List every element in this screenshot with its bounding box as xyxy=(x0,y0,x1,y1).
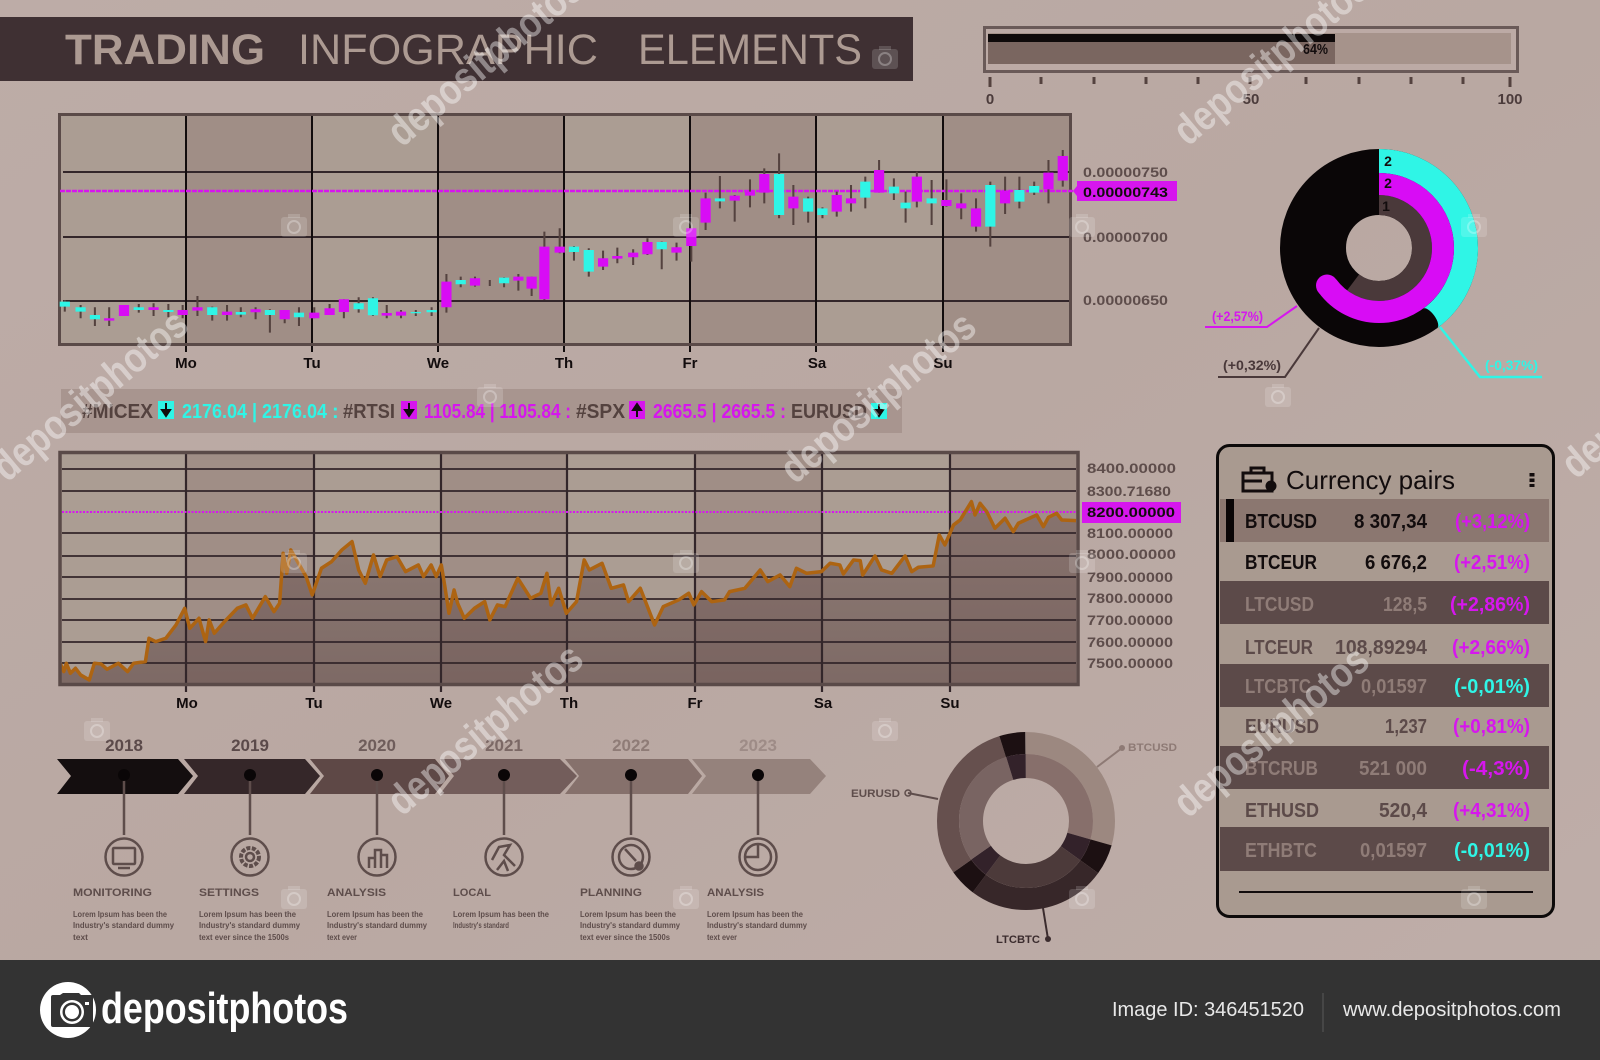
candlestick weekday labels: Mo xyxy=(175,355,197,372)
watermark: depositphotos xyxy=(771,302,985,492)
step: analysis 2023: text ever xyxy=(707,933,737,942)
step: analysis: Lorem Ipsum has been the xyxy=(327,910,424,919)
row: LTCEUR: LTCEUR xyxy=(1245,637,1313,659)
title banner: ELEMENTS xyxy=(638,26,862,74)
row: LTCEUR xyxy=(1245,637,1530,659)
icon: monitor xyxy=(106,838,142,876)
step: planning: PLANNING xyxy=(580,887,642,899)
step: planning xyxy=(580,887,681,942)
line chart weekday labels: Th xyxy=(560,695,578,712)
ticker strip: #SPX xyxy=(576,401,626,423)
row: LTCUSD: (+2,86%) xyxy=(1450,594,1530,616)
donut label: LTCBTC xyxy=(996,908,1051,946)
line chart price axis: 8000.00000 xyxy=(1087,546,1176,562)
watermark: depositphotos xyxy=(1164,636,1378,826)
timeline years: 2020 xyxy=(358,736,396,755)
step: planning: Industry's standard dummy xyxy=(580,921,681,930)
site url: www.depositphotos.com xyxy=(1342,999,1561,1021)
line chart price axis: 7800.00000 xyxy=(1087,590,1173,606)
candlestick weekday labels: Th xyxy=(555,355,573,372)
row: BTCUSD: 8 307,34 xyxy=(1354,511,1428,533)
progress gauge: 50 xyxy=(1243,91,1259,108)
line chart weekday labels: Fr xyxy=(688,695,703,712)
timeline years: 2019 xyxy=(231,736,269,755)
candlestick weekday labels: Su xyxy=(933,355,953,372)
ticker strip xyxy=(61,389,902,433)
row: ETHBTC: 0,01597 xyxy=(1360,840,1427,862)
row: LTCBTC xyxy=(1220,664,1549,707)
row: ETHBTC: ETHBTC xyxy=(1245,840,1317,862)
step: monitoring: MONITORING xyxy=(73,887,152,899)
line chart weekday labels: Sa xyxy=(814,695,833,712)
line chart weekday labels: Mo xyxy=(176,695,198,712)
row: EURUSD: (+0,81%) xyxy=(1453,716,1530,738)
line chart weekday labels xyxy=(176,695,960,712)
callout: +0,32%: (+0,32%) xyxy=(1223,357,1281,373)
row: LTCEUR: 108,89294 xyxy=(1335,637,1428,659)
step: settings xyxy=(199,887,301,942)
step: settings: SETTINGS xyxy=(199,887,259,899)
panel heading: Currency pairs xyxy=(1286,465,1455,495)
title banner: INFOGRAPHIC xyxy=(298,26,598,74)
row: BTCUSD: (+3,12%) xyxy=(1455,511,1530,533)
candlestick price axis: 0.00000750 xyxy=(1083,164,1168,180)
progress gauge: 100 xyxy=(1497,91,1523,108)
timeline years: 2023 xyxy=(739,736,777,755)
step: local: LOCAL xyxy=(453,887,491,899)
donut label: LTCBTC: LTCBTC xyxy=(996,934,1040,946)
row: ETHUSD: 520,4 xyxy=(1379,800,1428,822)
line chart price axis: 8200.00000 xyxy=(1087,504,1175,520)
step: monitoring xyxy=(73,887,175,942)
line chart price axis: 8300.71680 xyxy=(1087,483,1171,499)
step: local: Lorem Ipsum has been the xyxy=(453,910,550,919)
callout: +2,57% xyxy=(1205,306,1297,327)
timeline years: 2022 xyxy=(612,736,650,755)
title banner: TRADING xyxy=(65,26,265,74)
icon: pie xyxy=(740,838,776,876)
row: ETHUSD xyxy=(1245,800,1530,822)
row: BTCEUR: (+2,51%) xyxy=(1454,552,1530,574)
callout: +0,32% xyxy=(1218,328,1319,377)
line chart price axis: 7900.00000 xyxy=(1087,569,1173,585)
ticker strip: 2665.5 | 2665.5 : xyxy=(653,401,786,423)
step: settings: Lorem Ipsum has been the xyxy=(199,910,297,919)
callout: -0,37%: (-0,37%) xyxy=(1485,357,1538,373)
row: BTCEUR: BTCEUR xyxy=(1245,552,1317,574)
callout: -0,37% xyxy=(1440,327,1542,377)
step: analysis: ANALYSIS xyxy=(327,887,386,899)
row: BTCRUB: (-4,3%) xyxy=(1462,758,1530,780)
line chart price axis xyxy=(1082,460,1181,671)
icon: gauge xyxy=(612,838,650,876)
panel: currency pairs xyxy=(1218,446,1554,916)
candlestick price axis: 0.00000650 xyxy=(1083,292,1168,308)
ticker strip: 2176.04 | 2176.04 xyxy=(182,401,328,423)
candlestick price axis xyxy=(1073,164,1177,308)
donut label: BTCUSD xyxy=(1097,742,1177,767)
footer bar xyxy=(0,960,1600,1060)
area line chart xyxy=(60,452,1078,692)
ticker strip: #RTSI xyxy=(343,401,395,423)
step: planning: text ever since the 1500s xyxy=(580,933,671,942)
step: monitoring: Industry's standard dummy xyxy=(73,921,175,930)
row: LTCUSD: LTCUSD xyxy=(1245,594,1314,616)
donut label: BTCUSD: BTCUSD xyxy=(1128,742,1177,754)
step: settings: Industry's standard dummy xyxy=(199,921,301,930)
candlestick chart xyxy=(59,114,1075,352)
line chart price axis: 7700.00000 xyxy=(1087,612,1173,628)
step: local xyxy=(453,887,550,930)
timeline years: 2021 xyxy=(485,736,523,755)
candlestick weekday labels: We xyxy=(427,355,449,372)
timeline arrows xyxy=(57,759,826,794)
ticker strip: 1105.84 | 1105.84 : xyxy=(424,401,571,423)
watermark: depositphotos xyxy=(378,634,592,824)
icon: globe xyxy=(486,838,522,876)
step: local: Industry's standard xyxy=(453,921,509,930)
ticker strip: : xyxy=(332,401,339,423)
row: EURUSD: 1,237 xyxy=(1385,716,1427,738)
donut label: EURUSD: EURUSD xyxy=(851,788,900,800)
line chart price axis: 8400.00000 xyxy=(1087,460,1176,476)
line chart price axis: 7600.00000 xyxy=(1087,634,1173,650)
progress gauge xyxy=(984,28,1523,108)
row: LTCUSD xyxy=(1220,581,1549,624)
row: EURUSD xyxy=(1245,716,1530,738)
line chart price axis: 8100.00000 xyxy=(1087,525,1173,541)
candlestick weekday labels: Sa xyxy=(808,355,827,372)
line chart price axis: 7500.00000 xyxy=(1087,655,1173,671)
step: monitoring: text xyxy=(73,933,88,942)
timeline years xyxy=(105,736,777,755)
icon: wallet xyxy=(1243,468,1276,492)
candlestick price axis: 0.00000700 xyxy=(1083,229,1168,245)
row: ETHBTC: (-0,01%) xyxy=(1454,840,1530,862)
image id: Image ID: 346451520 xyxy=(1112,999,1304,1021)
icon: gear xyxy=(232,838,268,876)
row: ETHBTC xyxy=(1220,827,1549,871)
radial progress chart xyxy=(1292,153,1466,335)
candlestick weekday labels: Fr xyxy=(682,355,698,372)
footer logotype: depositphotos xyxy=(101,984,348,1033)
row: LTCEUR: (+2,66%) xyxy=(1452,637,1530,659)
step: analysis 2023 xyxy=(707,887,808,942)
row: LTCBTC: (-0,01%) xyxy=(1454,676,1530,698)
row: ETHUSD: ETHUSD xyxy=(1245,800,1319,822)
donut chart xyxy=(948,743,1104,899)
step: settings: text ever since the 1500s xyxy=(199,933,290,942)
step: analysis: Industry's standard dummy xyxy=(327,921,428,930)
icon: menu dots xyxy=(1530,473,1534,487)
ticker strip: #MICEX xyxy=(82,401,154,423)
radial progress chart: 1 xyxy=(1382,198,1390,214)
progress gauge: 0 xyxy=(986,91,994,108)
row: LTCBTC: LTCBTC xyxy=(1245,676,1311,698)
line chart weekday labels: We xyxy=(430,695,452,712)
row: LTCUSD: 128,5 xyxy=(1383,594,1427,616)
row: ETHUSD: (+4,31%) xyxy=(1453,800,1530,822)
candlestick price axis: 0.00000743 xyxy=(1083,184,1168,200)
title banner xyxy=(0,17,913,81)
step: planning: Lorem Ipsum has been the xyxy=(580,910,677,919)
radial progress chart: 2 xyxy=(1384,153,1392,169)
row: BTCRUB xyxy=(1220,746,1549,789)
icon: bars xyxy=(358,838,396,876)
timeline years: 2018 xyxy=(105,736,143,755)
donut label: EURUSD xyxy=(851,788,938,800)
step: analysis xyxy=(327,887,428,942)
row: BTCUSD: BTCUSD xyxy=(1245,511,1317,533)
step: monitoring: Lorem Ipsum has been the xyxy=(73,910,168,919)
step: analysis: text ever xyxy=(327,933,357,942)
row: BTCRUB: 521 000 xyxy=(1359,758,1427,780)
callout: +2,57%: (+2,57%) xyxy=(1212,308,1263,324)
row: LTCBTC: 0,01597 xyxy=(1361,676,1427,698)
row: BTCUSD xyxy=(1220,499,1549,542)
row: BTCEUR xyxy=(1245,552,1530,574)
row: BTCRUB: BTCRUB xyxy=(1245,758,1318,780)
candlestick weekday labels: Tu xyxy=(303,355,321,372)
ticker strip: EURUSD xyxy=(791,401,867,423)
row: BTCEUR: 6 676,2 xyxy=(1365,552,1427,574)
step: analysis 2023: Lorem Ipsum has been the xyxy=(707,910,804,919)
line chart weekday labels: Su xyxy=(940,695,960,712)
progress gauge: 64% xyxy=(1303,41,1328,58)
timeline stems and dots xyxy=(118,769,764,835)
step: analysis 2023: ANALYSIS xyxy=(707,887,764,899)
line chart weekday labels: Tu xyxy=(305,695,323,712)
candlestick weekday labels xyxy=(175,355,953,372)
step: analysis 2023: Industry's standard dummy xyxy=(707,921,808,930)
icon: depositphotos logo xyxy=(40,982,96,1038)
radial progress chart: 2 xyxy=(1384,175,1392,191)
row: EURUSD: EURUSD xyxy=(1245,716,1319,738)
